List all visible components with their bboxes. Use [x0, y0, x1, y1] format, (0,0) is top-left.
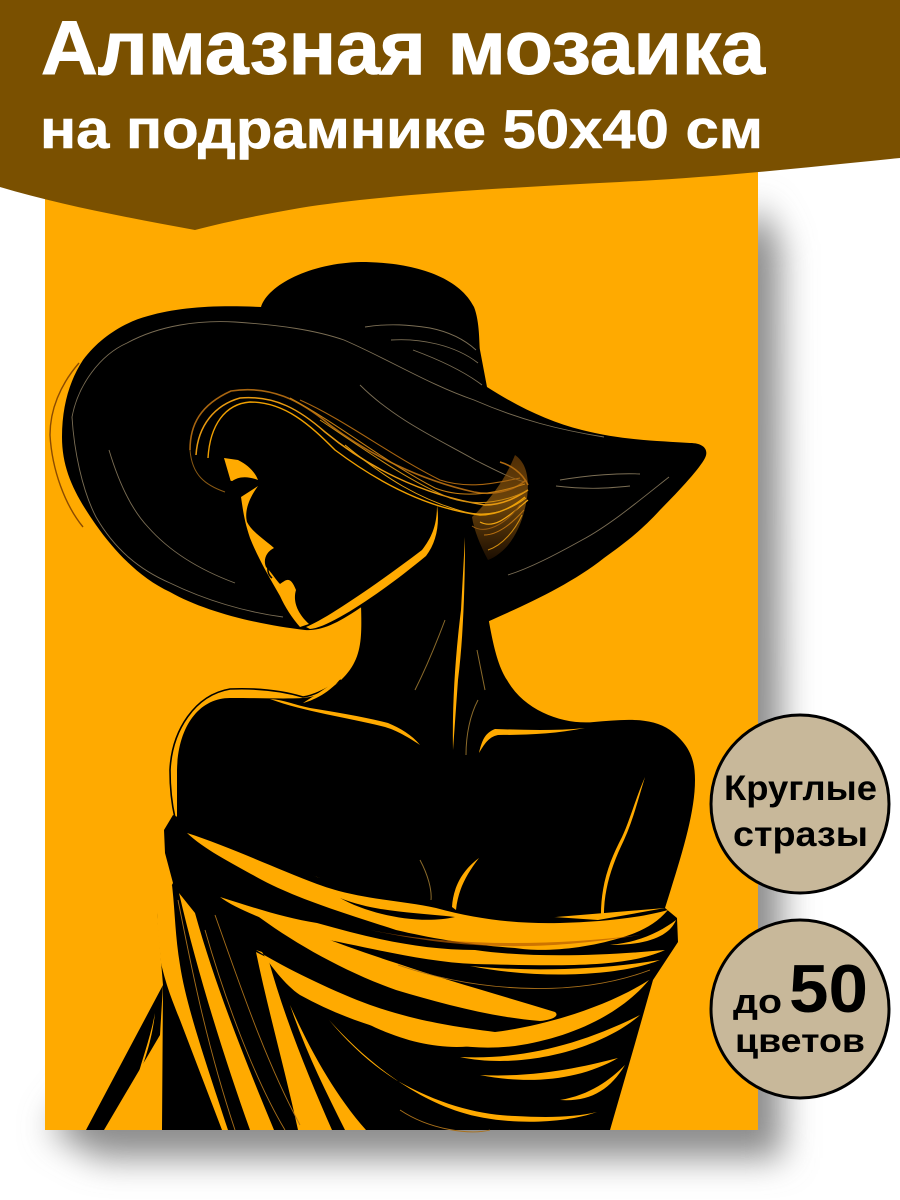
stripe 4 trailing [355, 1017, 480, 1047]
stripe 2 tail [470, 960, 660, 975]
band shadow [340, 898, 455, 920]
thin fabric lines [178, 900, 650, 1132]
face profile [224, 458, 309, 627]
jaw line [306, 505, 438, 629]
hat [62, 262, 706, 630]
fabric base [157, 815, 678, 1130]
right upper streaks [460, 1015, 640, 1100]
vertical fold 4 [290, 1005, 366, 1130]
collarbone highlights [270, 699, 645, 920]
title line 1: Алмазная мозаика [41, 6, 766, 91]
hat highlight lines [72, 322, 669, 617]
stripe 4 [256, 950, 649, 1048]
badge: up to 50 colours [711, 920, 889, 1098]
left shoulder sliver [303, 672, 345, 703]
badge number: 50: 50 [789, 951, 868, 1027]
badge word: до: до [733, 983, 782, 1021]
left fold band [86, 985, 163, 1130]
neck line [453, 537, 465, 750]
stripe 5 [329, 1020, 597, 1122]
left shoulder outline [170, 680, 341, 818]
hat outer rim line [50, 363, 83, 527]
figure: woman silhouette [50, 262, 706, 1132]
vertical fold 2 [179, 893, 274, 1130]
banner background [0, 0, 900, 230]
badge word: цветов: цветов [735, 1022, 865, 1059]
body and neck [177, 555, 695, 925]
stripe 3 [246, 907, 557, 1021]
band streak [370, 930, 640, 946]
stripe 2 [220, 897, 665, 965]
draped fabric [86, 815, 678, 1132]
painting canvas [45, 170, 758, 1132]
top band [187, 833, 668, 950]
right knot streaks [600, 920, 676, 958]
badge: round rhinestones [711, 715, 889, 893]
top banner [0, 0, 900, 230]
vertical fold 1 [157, 885, 228, 1130]
neck secondary lines [415, 620, 485, 755]
hair [190, 390, 528, 560]
vertical fold 3 [256, 952, 332, 1130]
badge text line 1: Круглые [724, 769, 877, 808]
title line 2: на подрамнике 50х40 см [40, 98, 763, 160]
fold wedge [135, 1013, 155, 1087]
badge text line 2: стразы [733, 815, 868, 854]
canvas drop shadow [50, 205, 782, 1158]
